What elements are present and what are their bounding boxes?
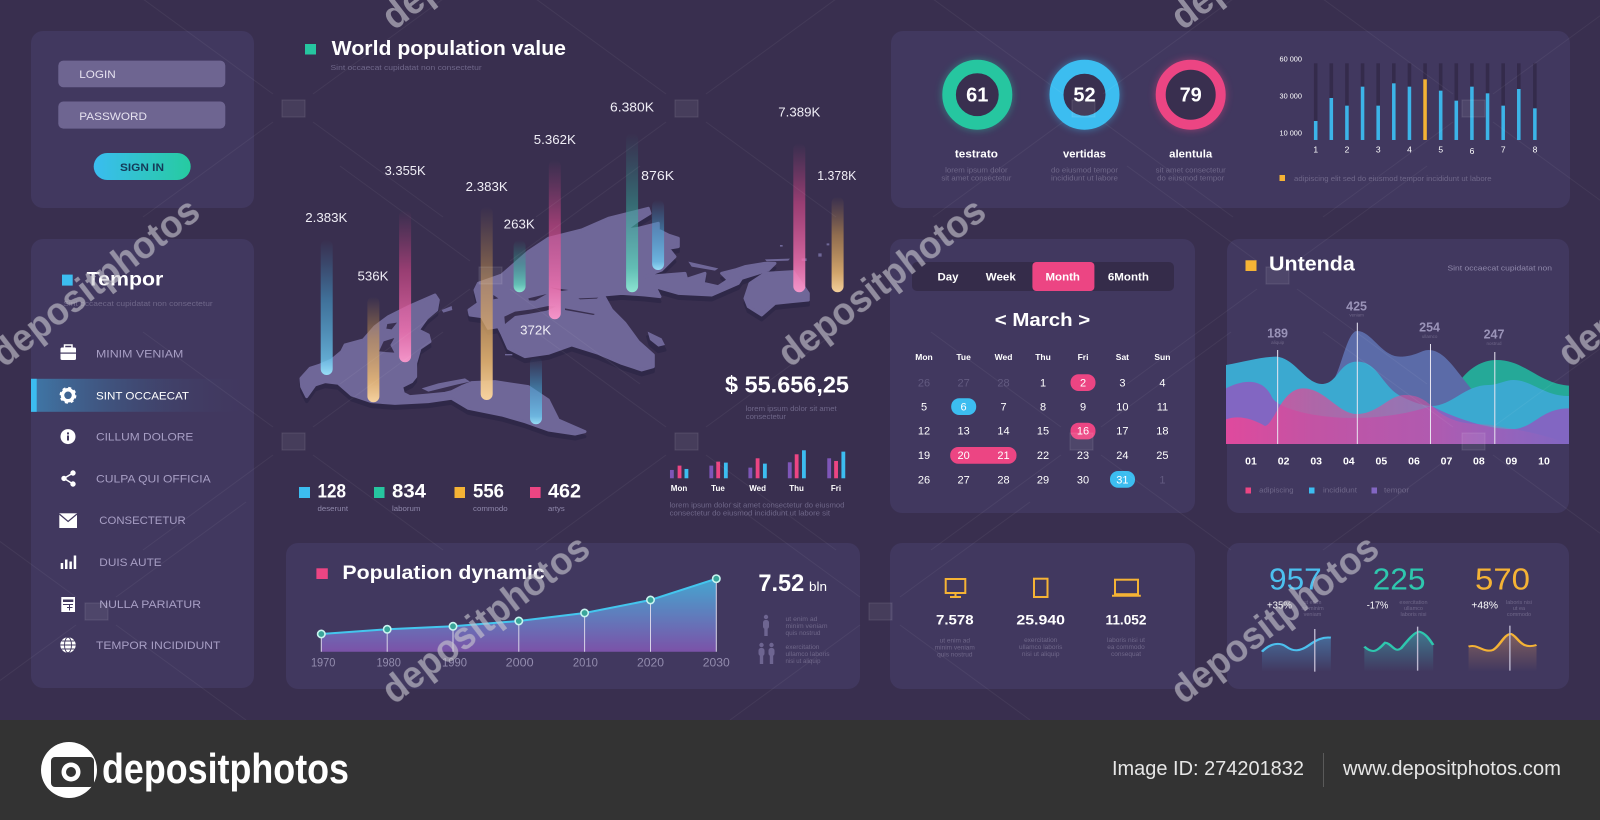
device stat 3: laboris nisi ut (1107, 637, 1145, 644)
data column 2: 536K (358, 269, 389, 284)
calendar weekdays: Sat (1116, 352, 1129, 362)
data column 6 (534, 132, 576, 319)
calendar tabs: Day (938, 272, 959, 284)
data column 6: 5.362K (534, 132, 576, 147)
panel: population dynamic (286, 543, 860, 689)
calendar days: 18 (1156, 426, 1169, 438)
device stat 1 (935, 611, 975, 659)
legend item commodo: 556 (473, 482, 504, 503)
icon: person (763, 615, 769, 636)
heading: world population value: World population value (332, 38, 566, 60)
calendar days (918, 377, 1169, 486)
population stat (758, 570, 827, 597)
data column 5 (504, 217, 535, 292)
heading: world population value: Sint occaecat cupidatat non consectetur (330, 63, 482, 72)
stat 225: ullamco (1404, 606, 1423, 612)
area legend: tempor (1384, 486, 1410, 495)
calendar weekdays: Wed (995, 352, 1012, 362)
bar chart (1280, 55, 1538, 183)
legend item laborum: 834 (392, 482, 426, 503)
x axis labels: 09 (1506, 455, 1517, 467)
untenda heading: Untenda (1269, 254, 1356, 276)
panel: devices (890, 543, 1195, 689)
device stat 3 (1106, 611, 1147, 658)
population notes: ut enim ad (786, 616, 818, 623)
bar chart: 2 (1345, 145, 1350, 155)
footer image id: Image ID: 274201832 (1112, 758, 1304, 780)
x axis labels (1245, 455, 1550, 467)
calendar days: 28 (997, 377, 1010, 389)
area line chart: 1970 (311, 658, 335, 670)
menu heading: Tempor (87, 270, 164, 291)
device stat 2: 25.940 (1016, 611, 1065, 627)
icon: gear (61, 388, 75, 403)
x axis labels: 01 (1245, 455, 1257, 467)
x axis labels: 07 (1441, 455, 1452, 467)
sign in button: SIGN IN (120, 162, 164, 174)
device stat 2: ullamco laboris (1019, 644, 1063, 651)
device stat 3: 11.052 (1106, 611, 1147, 627)
calendar days: 20 (957, 450, 970, 462)
stat 225: laboris nisi (1401, 612, 1426, 618)
icon: info (60, 429, 76, 444)
calendar tabs (912, 262, 1174, 291)
donut testrato (941, 66, 1012, 183)
stacked area chart (1226, 323, 1569, 444)
calendar days: 26 (918, 474, 930, 486)
icon: share (62, 471, 75, 486)
weekly mini bar chart: consectetur do eiusmod incididunt ut labore sit (670, 509, 831, 518)
donut testrato: sit amet consectetur (941, 174, 1012, 183)
peak labels: ullamco (1422, 334, 1438, 339)
population notes: minim veniam (786, 623, 828, 630)
calendar month: < March > (995, 309, 1090, 330)
data column 4 (466, 179, 508, 400)
bar chart: 5 (1438, 145, 1443, 155)
calendar days: 24 (1116, 450, 1129, 462)
menu item: TEMPOR INCIDIDUNT (96, 640, 221, 652)
data column 8 (610, 99, 654, 292)
calendar days: 27 (957, 377, 970, 389)
calendar days: 25 (1156, 450, 1169, 462)
data column 1: 2.383K (305, 210, 348, 225)
donut vertidas: incididunt ut labore (1051, 174, 1118, 183)
total value (725, 372, 849, 421)
donut alentula: do eiusmod tempor (1157, 174, 1225, 183)
bar chart: 3 (1376, 145, 1381, 155)
donut testrato: lorem ipsum dolor (945, 166, 1008, 175)
calendar weekdays: Fri (1078, 352, 1088, 362)
area line chart: 2010 (573, 658, 598, 670)
total value: $ 55.656,25 (725, 372, 849, 398)
weekly mini bar chart: Mon (671, 484, 687, 493)
weekly mini bar chart: Tue (711, 484, 725, 493)
calendar days: 27 (957, 474, 970, 486)
data column 4: 2.383K (466, 179, 508, 194)
calendar weekdays: Mon (915, 352, 933, 362)
area line chart: 1980 (376, 658, 401, 670)
calendar weekdays (915, 352, 1170, 362)
menu item: CONSECTETUR (99, 515, 186, 527)
data column 7 (520, 323, 551, 424)
population stat: 7.52 (758, 570, 804, 597)
icon: people (758, 643, 774, 664)
donut vertidas: 52 (1073, 85, 1096, 107)
data column 9: 876K (641, 168, 675, 183)
icon: bars (61, 556, 76, 569)
watermark text: depositphotos (1163, 527, 1387, 712)
untenda heading: Sint occaecat cupidatat non (1448, 264, 1552, 273)
icon: briefcase (60, 345, 76, 360)
menu item: CULPA QUI OFFICIA (96, 473, 211, 485)
calendar days: 7 (1000, 401, 1007, 413)
device stat 1: minim veniam (935, 645, 975, 652)
menu item: CILLUM DOLORE (96, 432, 193, 444)
calendar days: 10 (1116, 401, 1129, 413)
donut vertidas: do eiusmod tempor (1051, 166, 1119, 175)
calendar highlights (950, 374, 1135, 488)
stat 225: -17% (1367, 601, 1388, 612)
calendar days: 9 (1080, 401, 1086, 413)
calendar days: 13 (957, 426, 970, 438)
calendar tabs: Month (1046, 272, 1080, 284)
calendar days: 4 (1159, 377, 1165, 389)
calendar tabs: Week (986, 272, 1017, 284)
weekly mini bar chart: lorem ipsum dolor sit amet consectetur do eiusmod (670, 501, 844, 510)
calendar days: 1 (1159, 474, 1165, 486)
panel: stats sparklines (1227, 543, 1569, 689)
x axis labels: 02 (1278, 455, 1290, 467)
device stat 3: consequat (1111, 651, 1141, 658)
peak labels: 425 (1346, 299, 1367, 313)
bar chart: 7 (1501, 145, 1506, 155)
donut vertidas (1051, 67, 1119, 183)
population stat: bln (809, 579, 827, 594)
data column 9 (641, 168, 675, 270)
population notes: exercitation (786, 644, 820, 651)
world map (301, 208, 829, 439)
donut alentula: 79 (1180, 85, 1202, 107)
calendar weekdays: Sun (1154, 352, 1170, 362)
calendar weekdays: Tue (956, 352, 971, 362)
password field (58, 102, 225, 129)
password field: PASSWORD (79, 111, 147, 123)
x axis labels: 05 (1376, 455, 1387, 467)
stat 570: +48% (1471, 601, 1498, 612)
map land: eurasia and africa (469, 208, 829, 370)
bar chart: 8 (1533, 145, 1538, 155)
donut alentula: alentula (1169, 149, 1213, 161)
menu item: MINIM VENIAM (96, 348, 183, 360)
panel: login (31, 31, 254, 208)
calendar days: 1 (1040, 377, 1046, 389)
icon: monitor (946, 579, 965, 597)
calendar days: 29 (1037, 474, 1049, 486)
icon: tablet (1034, 579, 1048, 597)
area line chart (311, 575, 730, 670)
stat 225 (1367, 561, 1428, 618)
icon: globe (60, 637, 76, 653)
stat 225: exercitation (1399, 600, 1428, 606)
calendar days: 16 (1077, 426, 1089, 438)
x axis labels: 03 (1310, 455, 1322, 467)
calendar days: 3 (1119, 377, 1125, 389)
calendar days: 19 (918, 450, 930, 462)
legend item deserunt: 128 (318, 482, 346, 503)
stat 957 (1267, 561, 1324, 618)
stat 570: commodo (1507, 612, 1531, 618)
active row highlight (31, 379, 254, 412)
panel: donuts and bars (891, 31, 1570, 208)
footer bar (0, 720, 1600, 820)
donut testrato: 61 (966, 85, 988, 107)
panel: tempor menu (31, 239, 254, 688)
heading: world population value (305, 38, 566, 72)
data column 3: 3.355K (385, 163, 426, 178)
bar chart: 60 000 (1280, 55, 1302, 64)
watermark text: depositphotos (374, 527, 598, 712)
calendar days: 2 (1080, 377, 1086, 389)
calendar days: 8 (1040, 401, 1046, 413)
area line chart: 2000 (506, 658, 534, 670)
menu item active: SINT OCCAECAT (96, 390, 189, 402)
device stat 2: nisi ut aliquip (1022, 651, 1060, 658)
area line chart: 2020 (637, 658, 664, 670)
stat 570: ut ea (1513, 606, 1526, 612)
legend item commodo (454, 482, 508, 513)
device stat 2: exercitation (1024, 637, 1058, 644)
device stat 1: quis nostrud (937, 652, 973, 659)
population notes (786, 616, 830, 665)
watermark text: depositphotos (770, 190, 994, 375)
peak labels: 254 (1419, 320, 1440, 334)
weekly mini bar chart: Fri (831, 484, 841, 493)
calendar days: 21 (997, 450, 1010, 462)
peak labels: veniam (1349, 312, 1364, 318)
donut alentula (1156, 65, 1226, 183)
footer logo: depositphotos (102, 745, 349, 792)
data column 5: 263K (504, 217, 535, 232)
menu item: DUIS AUTE (99, 557, 162, 569)
data column 10 (778, 105, 821, 292)
data column 11 (817, 168, 857, 292)
calendar days: 23 (1077, 450, 1089, 462)
bar chart: 10 000 (1280, 128, 1302, 137)
legend: map totals (299, 482, 581, 513)
icon: mail (59, 513, 77, 528)
watermark camera icons (85, 100, 1485, 620)
legend item laborum: laborum (392, 504, 420, 513)
area line chart: 2030 (703, 658, 730, 670)
panel: untenda (1226, 239, 1569, 513)
x axis labels: 10 (1538, 455, 1550, 467)
stat 957: 957 (1269, 561, 1322, 596)
bar chart: adipiscing elit sed do eiusmod tempor incididunt ut labore (1294, 174, 1492, 183)
calendar tabs: 6Month (1108, 272, 1149, 284)
map land: americas (301, 295, 585, 434)
stat 957: veniam (1304, 612, 1322, 618)
area legend (1246, 486, 1410, 495)
legend item artys (530, 482, 581, 513)
peak labels: 189 (1267, 327, 1288, 341)
calendar weekdays: Thu (1035, 352, 1051, 362)
bar chart: 30 000 (1280, 92, 1302, 101)
sign in button (94, 153, 191, 180)
total value: lorem ipsum dolor sit amet (746, 404, 838, 413)
stat 957: ut enim (1303, 600, 1322, 606)
area legend: incididunt (1323, 486, 1358, 495)
x axis labels: 06 (1408, 455, 1420, 467)
calendar days: 28 (997, 474, 1010, 486)
data column 10: 7.389K (778, 105, 821, 120)
stat 570 (1471, 561, 1532, 618)
legend item deserunt: deserunt (318, 504, 349, 513)
stat 570: laboris nisi (1506, 600, 1532, 606)
weekly mini bar chart: Wed (749, 484, 766, 493)
panel: calendar (890, 239, 1195, 513)
donut alentula: sit amet consectetur (1156, 166, 1226, 175)
footer url: www.depositphotos.com (1342, 758, 1561, 780)
map shadow (301, 213, 808, 439)
calendar days: 6 (961, 401, 967, 413)
population heading: Population dynamic (342, 563, 545, 584)
donut vertidas: vertidas (1063, 149, 1106, 161)
data column 8: 6.380K (610, 99, 654, 114)
sparkline charts (1262, 626, 1537, 672)
weekly mini bar chart: Thu (789, 484, 804, 493)
legend item laborum (374, 482, 426, 513)
stat 957: +35% (1267, 601, 1292, 612)
peak labels: aliquip (1271, 340, 1285, 345)
calendar days: 5 (921, 401, 927, 413)
login field (58, 61, 225, 87)
total value: consectetur (746, 412, 787, 421)
peak labels (1267, 299, 1504, 346)
bar chart: 1 (1313, 145, 1318, 155)
donut testrato: testrato (955, 149, 998, 161)
stat 957: ad minim (1301, 606, 1324, 612)
population notes: ullamco laboris (786, 651, 830, 658)
icon: laptop (1112, 580, 1141, 596)
stat 225: 225 (1373, 561, 1426, 596)
legend item commodo: commodo (473, 504, 508, 513)
legend item deserunt (299, 482, 349, 513)
calendar days: 17 (1116, 426, 1129, 438)
area legend: adipiscing (1259, 486, 1294, 495)
device stat 2 (1016, 611, 1065, 658)
footer logo (41, 742, 349, 798)
population notes: quis nostrud (786, 630, 821, 637)
legend item artys: artys (548, 504, 565, 513)
data column 11: 1.378K (817, 168, 857, 183)
legend item artys: 462 (548, 482, 581, 503)
data column 2 (358, 269, 389, 402)
calendar days: 15 (1037, 426, 1049, 438)
calendar days: 11 (1157, 401, 1168, 413)
bar chart: 4 (1407, 145, 1412, 155)
stat 570: 570 (1475, 561, 1530, 596)
calendar days: 26 (918, 377, 930, 389)
calendar days: 31 (1116, 474, 1129, 486)
weekly mini bar chart (670, 450, 845, 518)
untenda heading (1246, 254, 1552, 276)
calendar days: 22 (1037, 450, 1049, 462)
data column 3 (385, 163, 426, 362)
device stat 1: 7.578 (936, 611, 974, 627)
data column 7: 372K (520, 323, 551, 338)
data column 1 (305, 210, 348, 375)
device stat 3: ea commodo (1107, 644, 1145, 651)
menu item: NULLA PARIATUR (99, 599, 201, 611)
x axis labels: 08 (1473, 455, 1485, 467)
peak labels: nostrud (1486, 341, 1502, 346)
population notes: nisi ut aliquip (786, 658, 821, 665)
device stat 1: ut enim ad (940, 638, 970, 645)
bar chart: 6 (1470, 146, 1475, 156)
area line chart: 1990 (442, 658, 467, 670)
calendar days: 14 (997, 426, 1010, 438)
x axis labels: 04 (1343, 455, 1355, 467)
icon: calculator (61, 597, 75, 612)
calendar days: 30 (1077, 474, 1089, 486)
peak labels: 247 (1484, 328, 1504, 342)
calendar days: 12 (918, 426, 930, 438)
login field: LOGIN (79, 69, 116, 81)
menu heading (62, 270, 213, 308)
menu heading: Sint occaecat cupidatat non consectetur (63, 299, 213, 308)
